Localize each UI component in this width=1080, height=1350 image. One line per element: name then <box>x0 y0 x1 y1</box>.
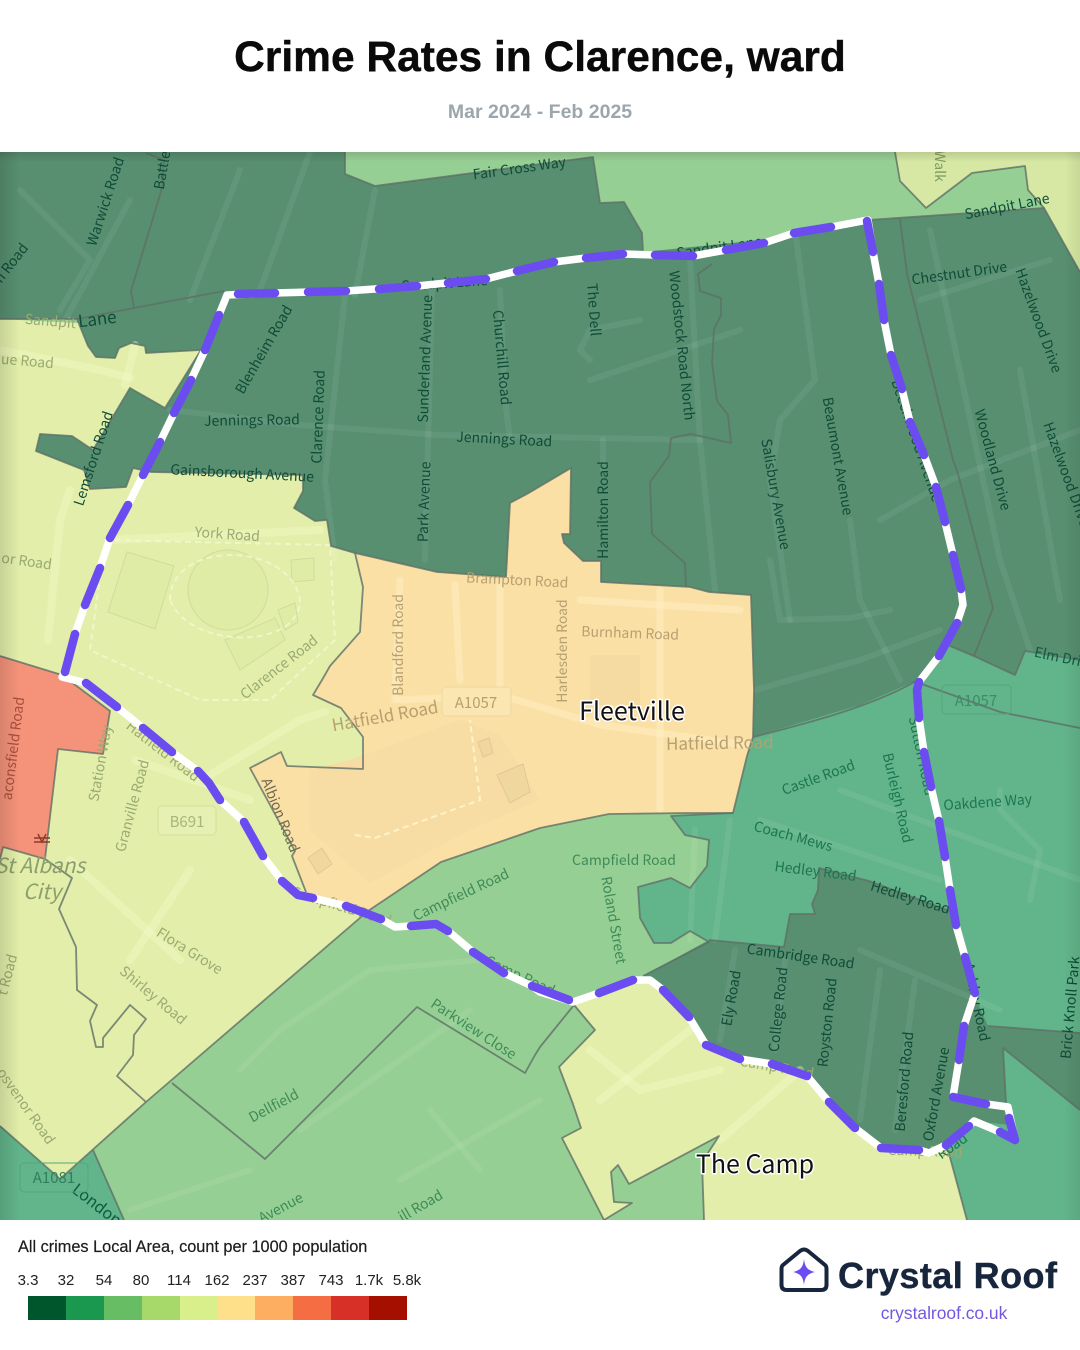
street labels on light green: Dellfield <box>245 1084 302 1127</box>
legend values and swatches: 743 <box>318 1272 344 1289</box>
street labels on dark green: Lemsford Road <box>69 409 118 508</box>
legend scale <box>18 1272 422 1320</box>
street labels on dark green: Lane <box>76 303 118 332</box>
area: peach Fleetville <box>250 468 754 911</box>
legend values and swatches: 387 <box>280 1272 306 1289</box>
legend title: All crimes Local Area, count per 1000 population <box>18 1238 367 1256</box>
road network <box>20 152 1080 1210</box>
street labels on dark green: Gainsborough Avenue <box>170 459 315 487</box>
street labels on light green: Roland Street <box>596 875 632 966</box>
legend values and swatches: 162 <box>204 1272 230 1289</box>
street labels on peach: Albion Road <box>257 775 305 855</box>
logo icon: house with star <box>780 1248 828 1292</box>
street labels on yellow: ue Road <box>0 349 55 373</box>
street labels on mid green: Castle Road <box>779 755 858 800</box>
street labels on peach: Brampton Road <box>466 567 569 593</box>
road badge: A1057 west <box>442 687 511 716</box>
area: dark green south-east <box>643 868 1080 1153</box>
road badge: A1057 east <box>942 685 1011 714</box>
legend values and swatches <box>18 1272 422 1320</box>
legend values and swatches: 80 <box>133 1272 149 1289</box>
street labels on yellow: Sandpit <box>24 309 78 333</box>
bright roads on yellow <box>0 345 800 1140</box>
street labels on dark green: Beresford Road <box>890 1031 918 1132</box>
area: mid green south-west <box>0 1126 124 1220</box>
street labels on light green <box>245 150 950 1228</box>
street labels on yellow: Station Way <box>84 723 117 803</box>
area: yellow The Camp <box>559 980 967 1220</box>
bright roads on peach <box>395 580 745 810</box>
website url: crystalroof.co.uk <box>881 1303 1007 1323</box>
street labels on light green: Campfield Road <box>572 850 676 870</box>
street labels on mid green: Road <box>933 1128 972 1164</box>
icon: railway station <box>34 834 50 842</box>
ward boundary white line <box>62 220 1015 1153</box>
road badge: A1057 west: A1057 <box>455 692 497 713</box>
legend values and swatches: 54 <box>96 1272 112 1289</box>
street labels on yellow: Camp Road <box>738 1051 816 1083</box>
street labels on dark green: Jennings Road <box>456 427 553 452</box>
road badge: B691 <box>158 806 216 835</box>
street labels on mid green: Coach Mews <box>752 816 835 856</box>
street labels on dark green: Sandpit Lane <box>675 231 764 263</box>
street labels on dark green: Woodstock Road North <box>664 270 700 421</box>
street labels on peach: Hatfield Road <box>330 693 440 736</box>
street labels on dark green: Salisbury Avenue <box>756 437 796 551</box>
street labels on peach <box>257 567 774 855</box>
street labels on dark green: Sunderland Avenue <box>413 294 437 423</box>
street labels on yellow: Camp Road <box>887 1140 963 1162</box>
street labels on dark green: Beaumont Avenue <box>818 395 858 517</box>
street labels on peach: Harlesden Road <box>552 599 572 703</box>
street labels on dark green: Royston Road <box>812 977 842 1068</box>
street labels on dark green: Ashley Road <box>959 961 995 1043</box>
street labels on dark green: Warwick Road <box>81 154 129 248</box>
street labels on dark green: Blenheim Road <box>230 302 297 397</box>
street labels on peach: Burnham Road <box>581 621 679 645</box>
street labels on dark green: Hamilton Road <box>593 461 613 559</box>
street labels on dark green: Sandpit Lane <box>401 270 489 296</box>
street labels on yellow: Flora Grove <box>153 923 227 979</box>
park area tint <box>310 720 540 883</box>
street labels on mid green: Burleigh Road <box>878 751 918 845</box>
peach park block <box>308 655 640 883</box>
legend values and swatches: 3.3 <box>18 1272 38 1289</box>
street labels on dark green: Woodland Drive <box>970 407 1016 513</box>
street labels on dark green: The Dell <box>582 282 606 337</box>
street labels on yellow <box>0 309 963 1162</box>
street labels on dark green: Chestnut Drive <box>910 256 1008 290</box>
street labels on yellow: Shirley Road <box>115 961 191 1029</box>
map: crime rate choropleth <box>0 152 1080 1220</box>
road badge: B691: B691 <box>170 811 204 832</box>
area: salmon high crime <box>0 656 110 859</box>
street labels on dark green: Oxford Avenue <box>918 1045 954 1143</box>
street labels on dark green: College Road <box>764 966 792 1053</box>
St Albans City place label <box>0 850 87 906</box>
place label: The Camp: The Camp <box>696 1145 814 1181</box>
area: mid green east <box>638 646 1080 1220</box>
street labels on dark green: Park Avenue <box>413 461 435 542</box>
street labels on light green: Campfield Road <box>410 863 512 926</box>
street labels on yellow: Granville Road <box>110 757 154 854</box>
street labels on yellow: Campfield Road <box>289 881 394 931</box>
street labels on dark green: Clarence Road <box>306 370 330 464</box>
street labels on peach: Hatfield Road <box>666 728 774 755</box>
street labels on dark green: Cambridge Road <box>746 939 856 974</box>
area: dark green north <box>0 152 1080 737</box>
legend values and swatches: 114 <box>167 1272 191 1289</box>
street labels on light green: Camp Road <box>482 951 558 1000</box>
St Albans City place label: City <box>23 876 64 906</box>
street labels on dark green: Fair Cross Way <box>472 152 568 184</box>
legend values and swatches: 5.8k <box>393 1272 421 1289</box>
road badge: A1081 <box>20 1163 88 1192</box>
road badge: A1081: A1081 <box>33 1167 75 1188</box>
legend values and swatches: 32 <box>58 1272 74 1289</box>
street labels on dark green: Ely Road <box>716 969 746 1028</box>
street labels on yellow: Hatfield Road <box>122 716 204 786</box>
street labels on dark green: Hedley Road <box>868 876 953 919</box>
subtitle: date range: Mar 2024 - Feb 2025 <box>448 101 632 123</box>
park features near York Road <box>108 550 314 670</box>
street labels on mid green: Sutton Road <box>904 714 940 797</box>
street labels on mid green: Oakdene Way <box>943 789 1033 815</box>
street labels on peach: Blandford Road <box>388 594 408 696</box>
street labels on light green: Parkview Close <box>427 994 521 1064</box>
area: yellow west <box>0 319 368 1179</box>
internal area boundaries <box>0 152 1080 1220</box>
street labels on dark green: Jennings Road <box>204 409 300 431</box>
legend values and swatches: 237 <box>242 1272 268 1289</box>
street labels on yellow: Clarence Road <box>236 630 322 704</box>
ward boundary purple dashes <box>65 221 1015 1150</box>
street labels on mid green <box>68 642 1080 1256</box>
street labels on mid green: Hedley Road <box>773 856 858 886</box>
street labels on dark green: Beechwood Avenue <box>886 376 947 505</box>
title: Crime Rates in Clarence, ward <box>234 34 846 81</box>
street labels on yellow: York Road <box>193 522 261 546</box>
street labels on dark green: Hazelwood Drive <box>1010 265 1067 376</box>
place label: Fleetville: Fleetville <box>579 692 685 728</box>
street labels on dark green: Churchill Road <box>488 309 516 406</box>
street labels on yellow: or Road <box>0 548 53 574</box>
road badge: A1057 east: A1057 <box>955 690 997 711</box>
street labels on dark green: Sandpit Lane <box>963 188 1051 224</box>
area: yellow-green north-east <box>895 152 1080 272</box>
area: light green base <box>0 152 1080 1220</box>
legend values and swatches: 1.7k <box>355 1272 383 1289</box>
logo wordmark: Crystal Roof <box>838 1255 1057 1296</box>
map edge shading <box>0 152 1080 1220</box>
street labels on dark green <box>0 149 1080 1143</box>
park footpaths <box>90 540 335 700</box>
